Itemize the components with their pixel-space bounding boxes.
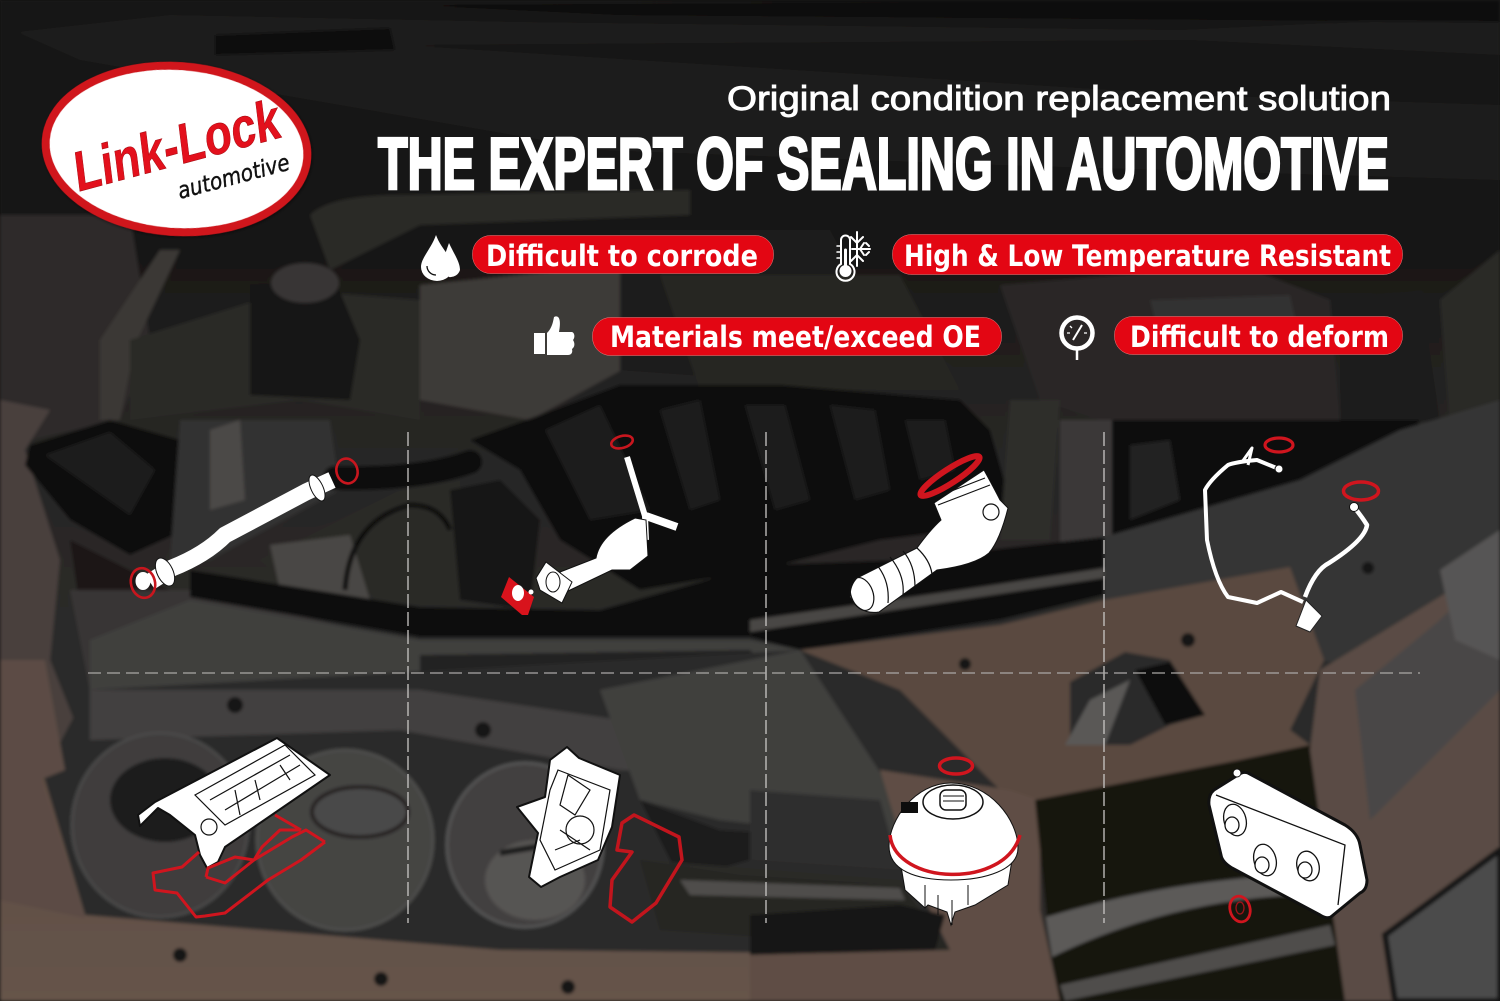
centre grille — [1035, 745, 1345, 1001]
grey lower panels — [40, 650, 1010, 960]
right grey band — [1104, 400, 1500, 680]
battery cover and left bay — [25, 420, 185, 555]
dashed divider lines — [88, 432, 1420, 923]
product: coolant expansion tank with seals — [889, 758, 1020, 925]
black hose — [335, 462, 470, 478]
product: oil cooler plate with O-ring — [1209, 769, 1367, 924]
right side — [1310, 560, 1500, 1001]
feature pill: high and low temperature resistant: High & Low Temperature Resistant — [904, 239, 1391, 273]
reservoir area brown — [880, 770, 1060, 1001]
product: water pump with gasket — [517, 747, 682, 922]
upper hood area — [17, 15, 1500, 180]
product: valve cover with gasket — [138, 738, 330, 917]
icon: thumbs up — [534, 316, 574, 355]
logo: Link-Lock automotive — [40, 57, 313, 241]
feature pill: difficult to deform: Difficult to deform — [1130, 320, 1389, 354]
icon: pressure gauge — [1062, 318, 1092, 360]
icon: water drops — [421, 235, 460, 281]
product: straight coolant pipe with two O-rings — [128, 456, 360, 601]
product: EGR pipe with flange gasket — [501, 433, 677, 615]
icon: thermometer and snowflake — [836, 232, 870, 281]
logo: Link-Lock automotive: automotive — [175, 150, 293, 205]
brown lower skirt — [0, 700, 1060, 1001]
fasteners — [173, 562, 1374, 994]
product: AC lines with O-rings — [1205, 438, 1378, 632]
subtitle: Original condition replacement solution — [727, 80, 1391, 118]
black crossmember — [190, 537, 1104, 650]
feature pill: difficult to corrode: Difficult to corrode — [486, 239, 758, 273]
intake manifold — [470, 385, 1010, 590]
left fender — [0, 400, 500, 1001]
headlight lenses — [72, 733, 603, 930]
brown hood slam panel — [800, 567, 1324, 830]
logo: Link-Lock automotive: Link-Lock — [71, 86, 284, 204]
feature pill: materials meet/exceed OE: Materials meet/exceed OE — [610, 320, 981, 354]
product: air intake hose with seal — [846, 451, 1008, 614]
